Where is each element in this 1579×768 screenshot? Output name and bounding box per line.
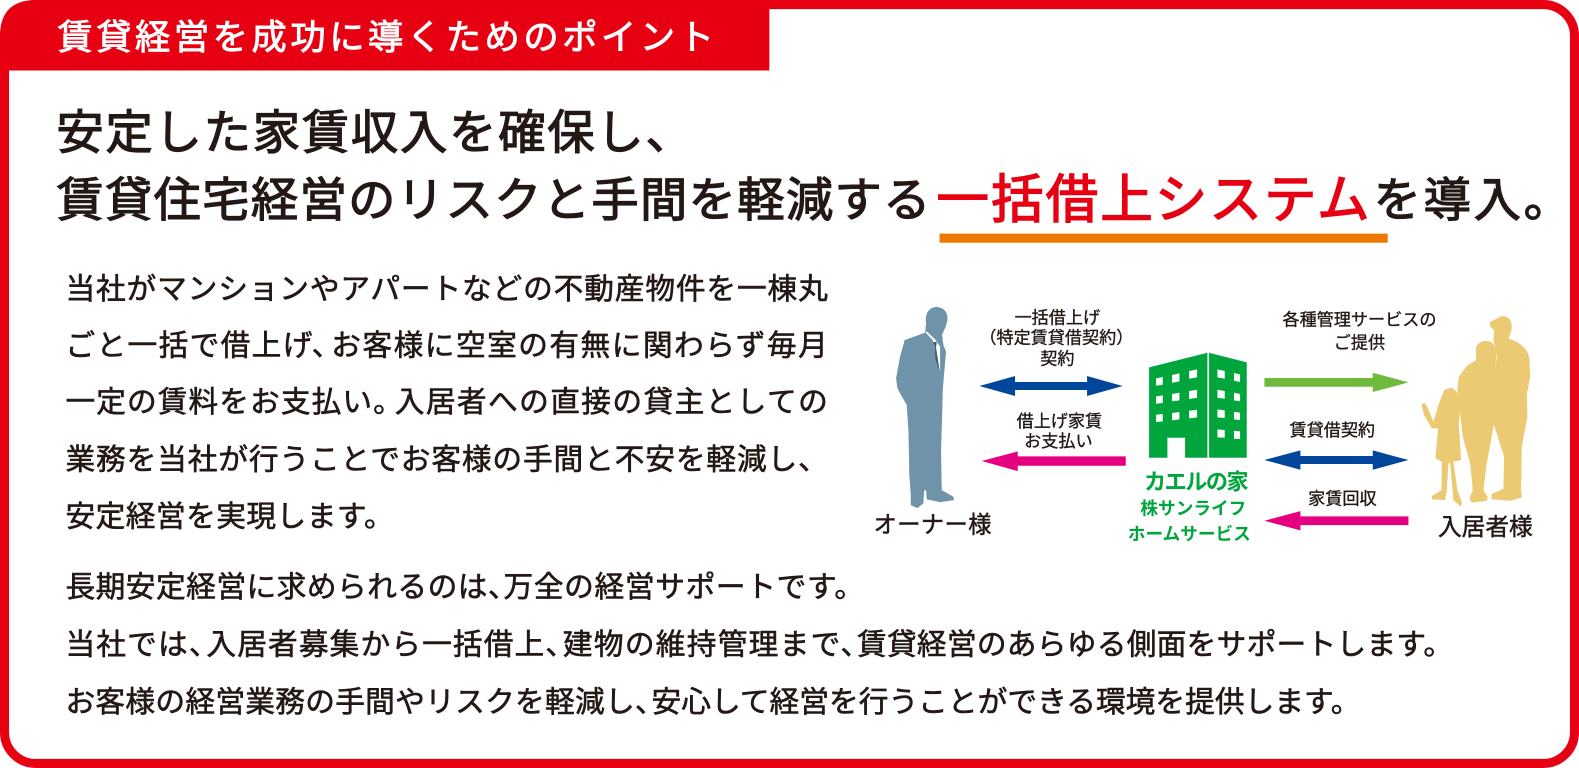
label: services: ご提供 xyxy=(1334,333,1385,352)
text block: management support: 当社では、 xyxy=(65,629,219,662)
icon: green building xyxy=(1149,353,1247,458)
icon: tenant family silhouette xyxy=(1421,316,1530,507)
text block: system description: 当社がマンションやアパートなどの不動産物件を一棟丸 xyxy=(65,273,828,306)
label: rent payment: お支払い xyxy=(1024,432,1093,451)
text block: system description: 入居者への直接の貸主としての xyxy=(395,386,828,419)
heading tab xyxy=(0,0,769,70)
arrow: lease contract xyxy=(979,376,1123,396)
label: rental contract: 賃貸借契約 xyxy=(1290,421,1375,440)
label: rent payment xyxy=(1017,412,1102,451)
label: company name: ホームサービス xyxy=(1128,524,1251,544)
icon: owner silhouette xyxy=(896,307,954,508)
label: lease contract: （特定賃貸借契約） xyxy=(979,328,1133,347)
text block: management support: 建物の維持管理まで、 xyxy=(563,629,870,662)
arrow: rent collection xyxy=(1264,511,1408,530)
label: services: 各種管理サービスの xyxy=(1282,310,1436,329)
label: company name: カエルの家 xyxy=(1144,469,1249,494)
heading tab: 賃貸経営を成功に導くためのポイント xyxy=(57,18,714,57)
text block: management support: 長期安定経営に求められるのは、 xyxy=(65,571,518,604)
text block: management support: 安心して経営を行うことができる環境を提供します。 xyxy=(652,686,1360,719)
orange underline xyxy=(940,234,1388,243)
label: company name: 株サンライフ xyxy=(1140,499,1246,519)
main heading: を導入。 xyxy=(1374,175,1571,228)
label: rent payment: 借上げ家賃 xyxy=(1017,412,1102,431)
arrow: rent payment xyxy=(982,451,1126,471)
label: lease contract: 一括借上げ xyxy=(1015,308,1100,327)
label: owner: オーナー様 xyxy=(874,512,991,538)
label: lease contract: 契約 xyxy=(1040,350,1074,369)
text block: system description xyxy=(65,273,828,534)
text block: system description: ごと一括で借上げ、 xyxy=(65,329,341,362)
label: services xyxy=(1282,310,1436,352)
text block: management support: 賃貸経営のあらゆる側面をサポートします。 xyxy=(857,629,1453,662)
label: tenants: 入居者様 xyxy=(1438,514,1533,541)
text block: system description: 一定の賃料をお支払い。 xyxy=(65,386,403,419)
text block: management support: 万全の経営サポートです。 xyxy=(504,571,864,604)
text block: system description: お客様に空室の有無に関わらず毎月 xyxy=(331,329,828,362)
text block: system description: 安定経営を実現します。 xyxy=(65,501,394,534)
arrow: rental contract xyxy=(1264,450,1408,470)
text block: management support: 入居者募集から一括借上、 xyxy=(206,629,575,662)
diagram: bulk lease scheme xyxy=(874,307,1533,544)
main heading xyxy=(56,107,1571,230)
text block: system description: 業務を当社が行うことでお客様の手間と不安を軽減し、 xyxy=(65,443,828,476)
main heading: 一括借上システム xyxy=(937,172,1370,230)
label: lease contract xyxy=(979,308,1133,369)
text block: management support: お客様の経営業務の手間やリスクを軽減し、 xyxy=(65,686,665,719)
main heading: 安定した家賃収入を確保し、 xyxy=(56,107,693,160)
label: company name xyxy=(1128,469,1251,544)
text block: management support xyxy=(65,571,1453,719)
arrow: services xyxy=(1264,373,1408,392)
main heading: 賃貸住宅経営のリスクと手間を軽減する xyxy=(56,175,930,228)
label: rent collection: 家賃回収 xyxy=(1308,490,1377,509)
